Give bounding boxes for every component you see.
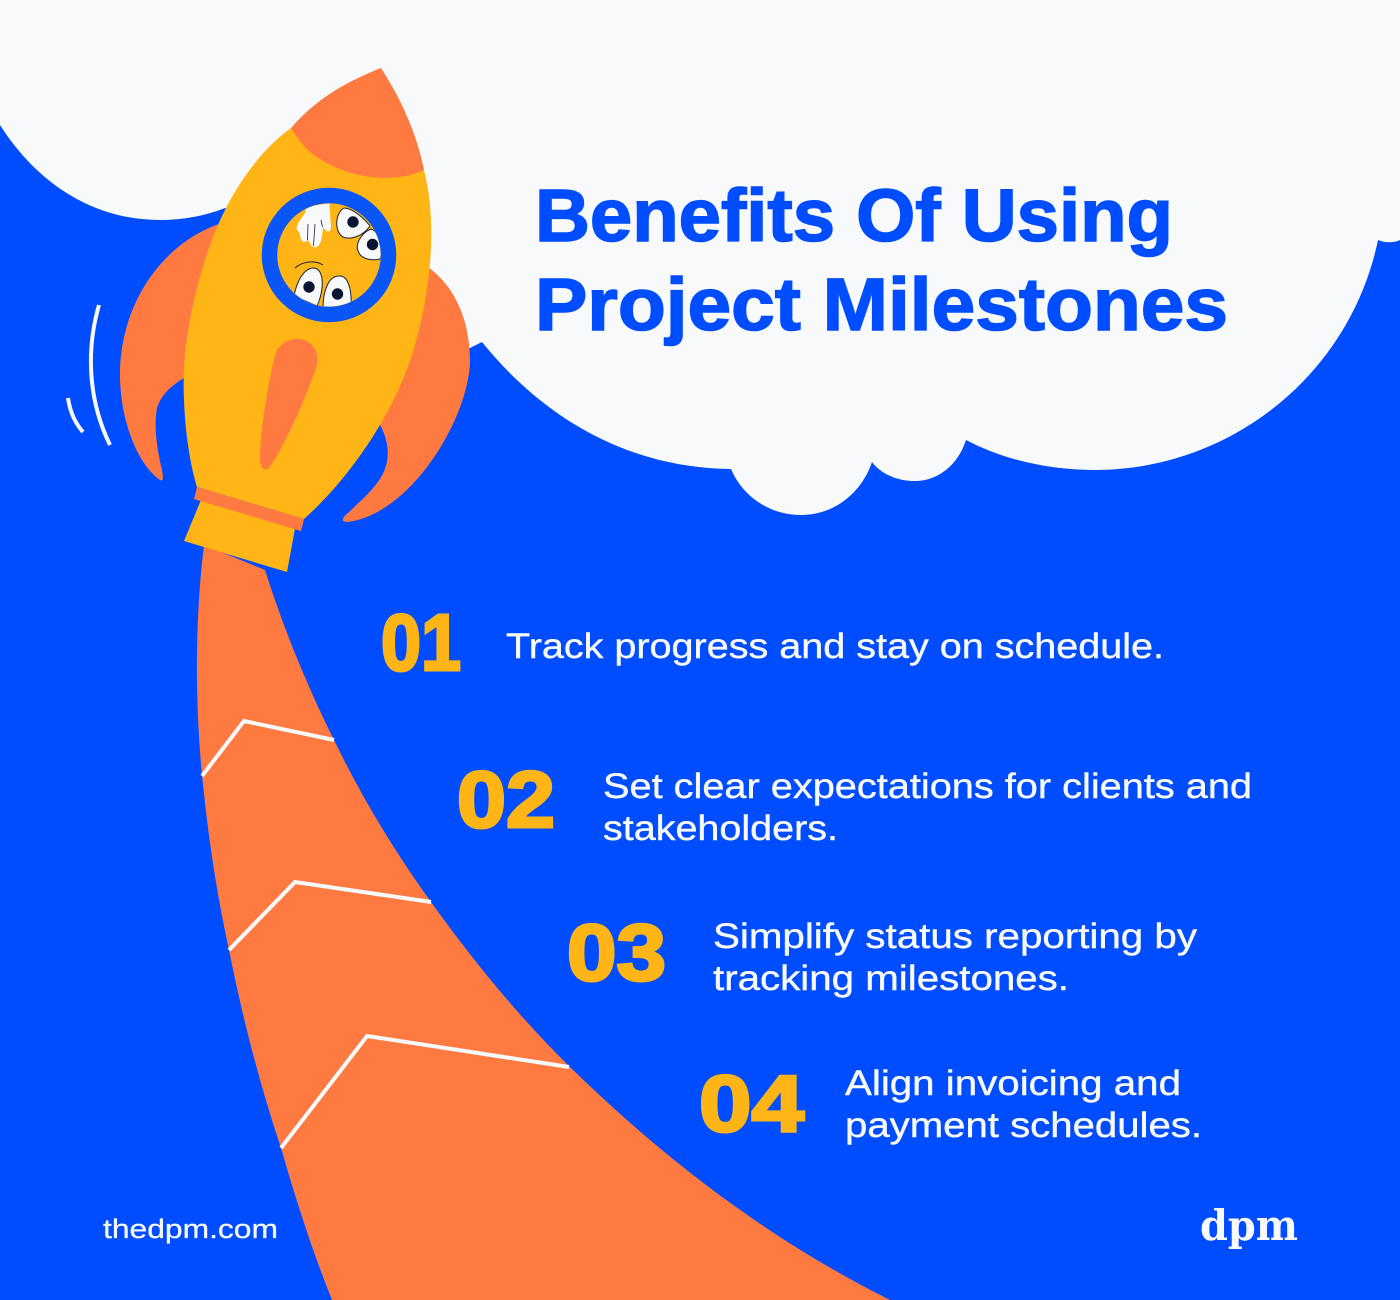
text 03: [713, 917, 1198, 998]
rocket flame trail: [197, 545, 890, 1300]
number 01: 01: [381, 598, 461, 687]
cloud: [0, 0, 1400, 515]
motion lines: [68, 305, 110, 445]
body: [184, 128, 431, 519]
body stripe: [260, 339, 318, 469]
benefit 03: [567, 908, 1198, 998]
benefit 01: [381, 598, 1164, 687]
nose cone: [291, 68, 424, 178]
window: [270, 196, 388, 314]
title: Benefits Of Using: [535, 174, 1173, 257]
text 04: [845, 1064, 1202, 1145]
text 02: stakeholders.: [603, 809, 838, 848]
number 03: 03: [567, 908, 666, 997]
title: [535, 174, 1228, 346]
left fin: [120, 222, 240, 480]
text 02: [603, 767, 1252, 848]
text 04: payment schedules.: [845, 1106, 1202, 1145]
number 02: 02: [457, 755, 555, 844]
text 02: Set clear expectations for clients and: [603, 767, 1252, 806]
benefit 02: [457, 755, 1252, 848]
dpm logo: dpm: [1200, 1201, 1298, 1250]
text 04: Align invoicing and: [845, 1064, 1181, 1103]
benefit 04: [699, 1059, 1202, 1148]
trail markers: [202, 721, 569, 1148]
title: Project Milestones: [535, 263, 1228, 346]
text 03: Simplify status reporting by: [713, 917, 1198, 956]
rocket: [120, 68, 470, 572]
text 03: tracking milestones.: [713, 959, 1069, 998]
nozzle: [184, 495, 296, 572]
text 01: Track progress and stay on schedule.: [506, 627, 1164, 666]
website url: thedpm.com: [103, 1214, 278, 1244]
number 04: 04: [699, 1059, 805, 1148]
band: [194, 487, 304, 531]
right fin: [343, 265, 470, 522]
astronaut eyes and hand: [294, 203, 382, 308]
